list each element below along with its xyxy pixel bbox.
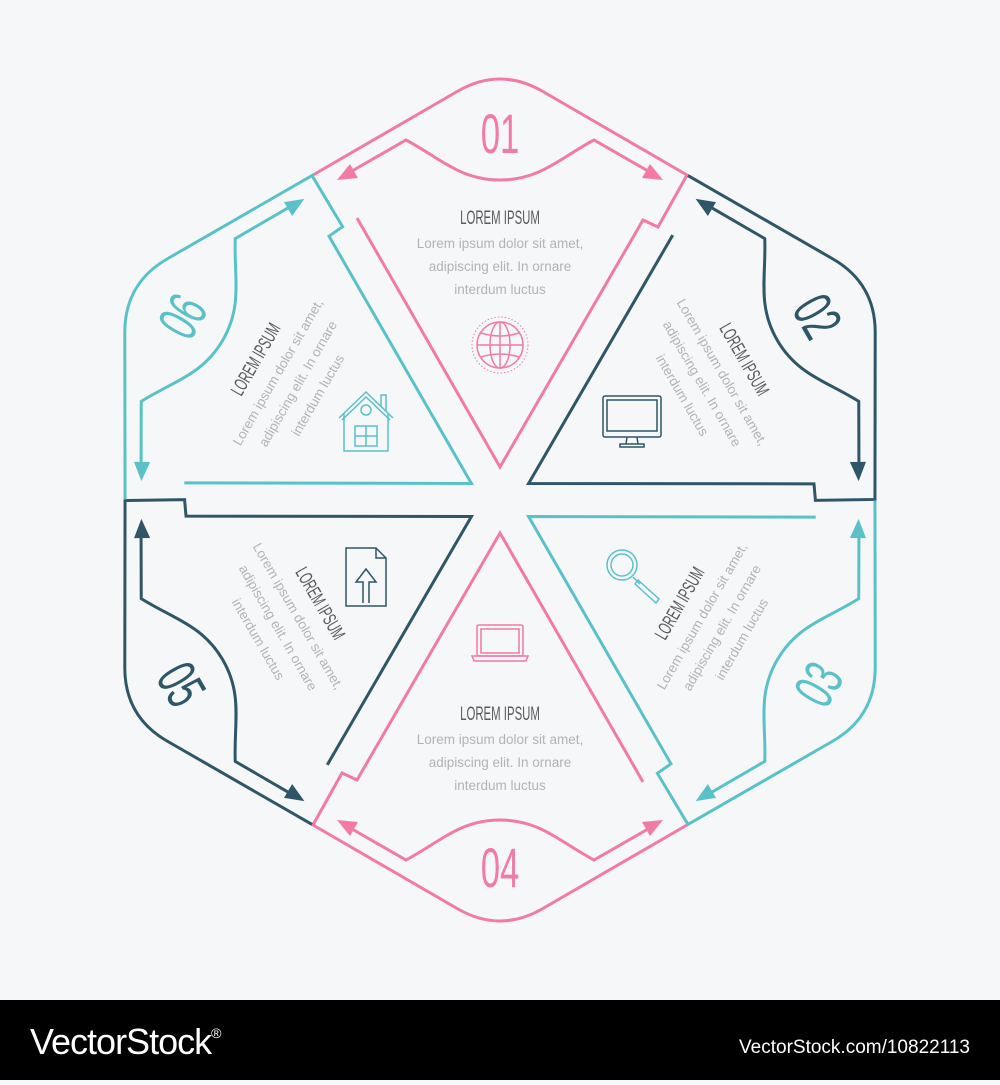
section 1 outline (313, 79, 687, 467)
icon: globe (472, 317, 528, 373)
section 6 outline (42, 128, 565, 645)
section 5 outline (42, 355, 565, 872)
footer bar (0, 1000, 1000, 1080)
icon: house (339, 392, 393, 451)
number 01: 01 (481, 103, 519, 165)
section 3 outline (435, 355, 958, 872)
text block 1 (417, 208, 583, 297)
icon: magnifier (607, 550, 659, 603)
footer bar: VectorStock.com/10822113 (739, 1037, 970, 1058)
text block 6 (206, 282, 366, 471)
text block 5 (210, 526, 370, 715)
text block 2 (634, 282, 794, 471)
number 05: 05 (145, 652, 218, 717)
section 2 outline (435, 128, 958, 645)
number 02: 02 (781, 284, 854, 349)
icon: file upload (346, 548, 386, 606)
icon: laptop (472, 625, 528, 661)
number 03: 03 (782, 652, 855, 717)
footer bar: VectorStock (30, 1021, 211, 1062)
text block 4 (417, 704, 583, 793)
footer bar: ® (211, 1025, 222, 1041)
icon: monitor (603, 396, 661, 447)
section 4 outline (313, 533, 687, 921)
number 06: 06 (146, 284, 219, 349)
number 04: 04 (481, 837, 519, 899)
text block 3 (630, 526, 790, 715)
